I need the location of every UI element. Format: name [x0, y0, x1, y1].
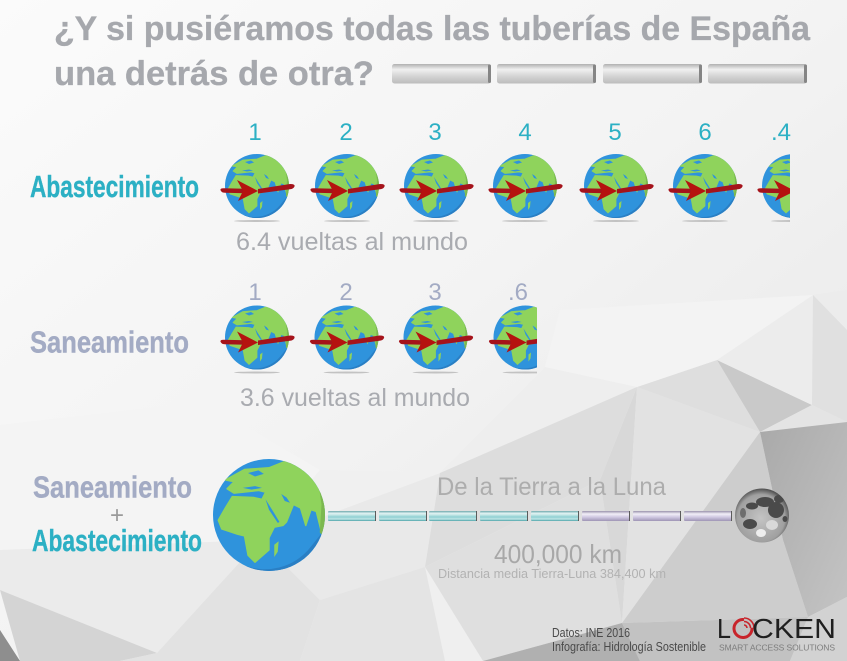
panel: earth to moon: [32, 459, 789, 581]
counter numbers: 6: [698, 119, 712, 146]
counter numbers: 5: [608, 119, 622, 146]
caption: 6.4 vueltas al mundo: [236, 228, 468, 256]
counter numbers: .4: [771, 119, 791, 146]
distance note: Distancia media Tierra-Luna 384,400 km: [438, 566, 666, 581]
counter numbers: 1: [248, 279, 262, 306]
credits: Datos: INE 2016: [552, 626, 630, 640]
title: [54, 10, 811, 93]
logo: Locken: CKEN: [752, 613, 836, 644]
logo: Locken: SMART ACCESS SOLUTIONS: [719, 642, 835, 652]
logo: Locken: L: [717, 613, 731, 644]
title: ¿Y si pusiéramos todas las tuberías de España: [54, 10, 811, 48]
label: Saneamiento + Abastecimiento: Abastecimiento: [32, 523, 202, 558]
icon: globes with arrow: [220, 306, 563, 374]
label: Saneamiento + Abastecimiento: +: [110, 502, 124, 529]
label: Saneamiento + Abastecimiento: Saneamiento: [33, 470, 192, 504]
counter numbers: 3: [428, 119, 442, 146]
counter numbers: 3: [428, 279, 442, 306]
icon: large earth: [213, 459, 332, 572]
label: Abastecimiento: Abastecimiento: [30, 169, 199, 204]
logo: Locken: [717, 613, 836, 652]
pipeline: teal and lilac pipes: [328, 511, 732, 521]
counter numbers: 1: [248, 119, 262, 146]
counter numbers: [248, 279, 528, 306]
icon: moon: [735, 488, 789, 542]
label: Saneamiento + Abastecimiento: [32, 470, 202, 558]
counter numbers: [248, 119, 791, 146]
title: una detrás de otra?: [54, 55, 374, 93]
title pipes: [392, 64, 807, 84]
counter numbers: 2: [339, 119, 353, 146]
distance value: 400,000 km: [494, 539, 622, 569]
label: Saneamiento: Saneamiento: [30, 324, 189, 360]
counter numbers: .6: [508, 279, 528, 306]
panel: abastecimiento row: [30, 123, 790, 250]
credits: [552, 626, 706, 654]
credits: Infografía: Hidrología Sostenible: [552, 640, 706, 654]
panel: saneamiento row: [30, 283, 537, 406]
caption: 3.6 vueltas al mundo: [240, 384, 470, 412]
counter numbers: 2: [339, 279, 353, 306]
icon: globes with arrow: [220, 154, 832, 222]
heading: De la Tierra a la Luna: De la Tierra a la Luna: [437, 473, 666, 501]
counter numbers: 4: [518, 119, 532, 146]
